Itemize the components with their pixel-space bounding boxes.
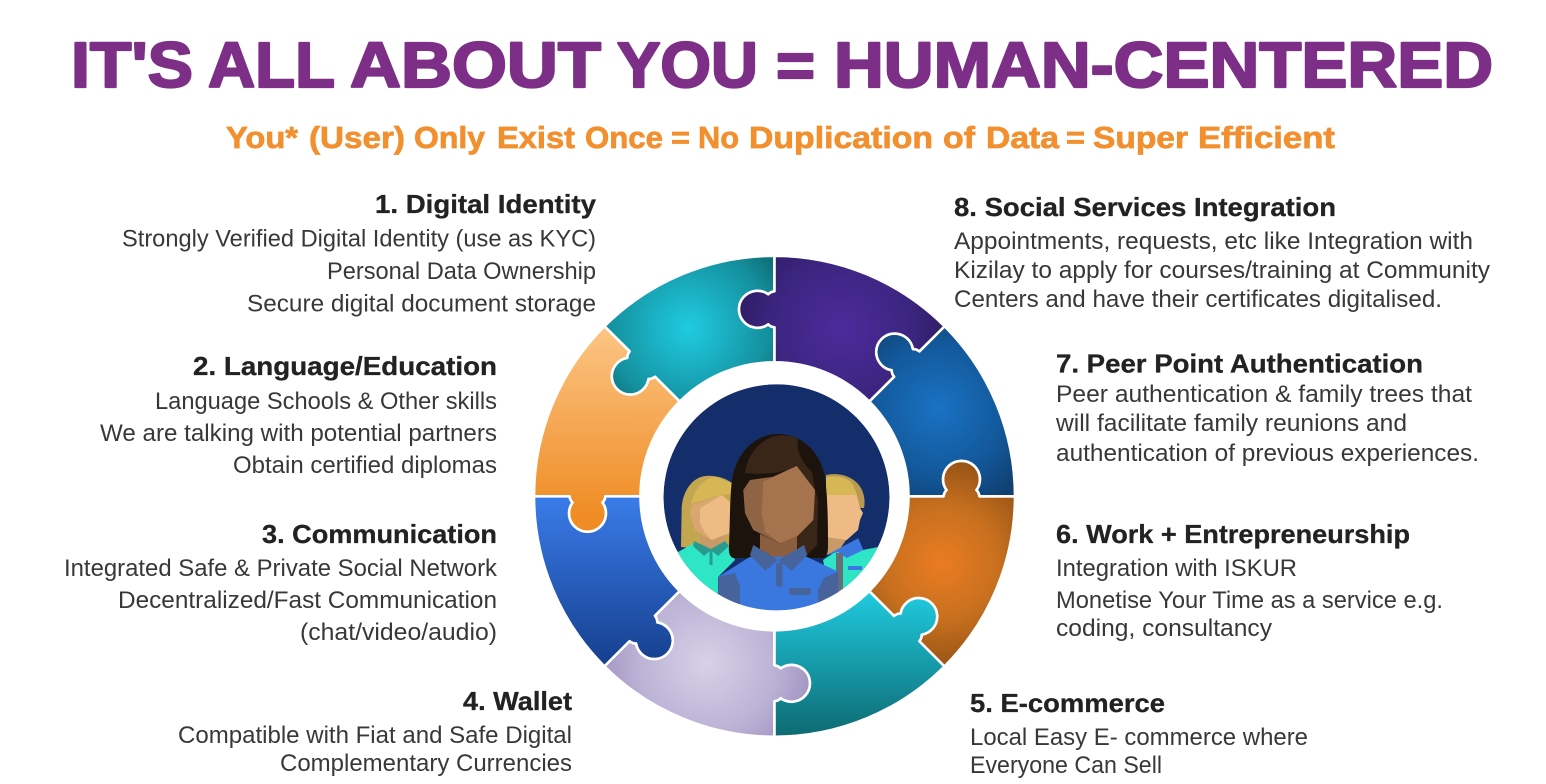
- text block: 7. Peer Point Authentication: Peer authentication & family trees that: [1056, 381, 1472, 408]
- text block: 8. Social Services Integration: Appointments, requests, etc like Integration with: [954, 228, 1473, 255]
- text block: 3. Communication: (chat/video/audio): [300, 619, 497, 646]
- text block: 4. Wallet: [178, 686, 572, 777]
- text block: 1. Digital Identity: Strongly Verified Digital Identity (use as KYC): [122, 226, 596, 252]
- title: =: [776, 29, 815, 101]
- subtitle: Super: [1093, 120, 1188, 155]
- title: HUMAN-CENTERED: [834, 29, 1493, 101]
- text block: 3. Communication: [64, 519, 498, 646]
- title: ABOUT: [350, 29, 601, 101]
- text block: 4. Wallet: 4. Wallet: [463, 686, 572, 716]
- text block: 7. Peer Point Authentication: [1055, 348, 1479, 467]
- text block: 5. E-commerce: Everyone Can Sell: [970, 752, 1162, 779]
- text block: 4. Wallet: Compatible with Fiat and Safe Digital: [178, 722, 572, 749]
- title: YOU: [617, 29, 758, 101]
- icon: right blond man: [823, 474, 878, 597]
- text block: 3. Communication: 3. Communication: [262, 519, 497, 549]
- subtitle: =: [671, 120, 690, 155]
- text block: 5. E-commerce: 5. E-commerce: [970, 688, 1165, 718]
- puzzle ring: [484, 206, 1065, 784]
- subtitle: You*: [226, 120, 299, 155]
- title: [71, 29, 1493, 101]
- text block: 3. Communication: Integrated Safe & Private Social Network: [64, 555, 498, 582]
- text block: 7. Peer Point Authentication: 7. Peer Point Authentication: [1056, 348, 1423, 378]
- puzzle piece 6: burnt orange: [869, 461, 1015, 666]
- text block: 1. Digital Identity: Personal Data Ownership: [327, 258, 596, 285]
- text block: 8. Social Services Integration: Kizilay to apply for courses/training at Community: [954, 257, 1490, 284]
- subtitle: No: [698, 120, 739, 155]
- subtitle: Data: [986, 120, 1060, 155]
- text block: 7. Peer Point Authentication: will facilitate family reunions and: [1055, 410, 1407, 437]
- subtitle: Exist: [497, 120, 575, 155]
- text block: 2. Language/Education: Obtain certified diplomas: [233, 452, 497, 479]
- text block: 6. Work + Entrepreneurship: coding, consultancy: [1056, 615, 1272, 642]
- text block: 1. Digital Identity: 1. Digital Identity: [375, 189, 597, 219]
- subtitle: Duplication: [749, 120, 933, 155]
- text block: 2. Language/Education: Language Schools & Other skills: [155, 388, 497, 415]
- text block: 6. Work + Entrepreneurship: Monetise Your Time as a service e.g.: [1056, 587, 1443, 614]
- subtitle: Only: [414, 120, 486, 155]
- puzzle piece 5: teal: [721, 538, 970, 784]
- text block: 2. Language/Education: [100, 351, 497, 479]
- text block: 5. E-commerce: Local Easy E- commerce where: [970, 724, 1308, 751]
- text block: 8. Social Services Integration: Centers and have their certificates digitalised.: [954, 286, 1442, 313]
- subtitle: of: [943, 120, 976, 155]
- subtitle: =: [1066, 120, 1085, 155]
- puzzle piece 4: lavender: [604, 591, 810, 737]
- text block: 8. Social Services Integration: [954, 192, 1490, 313]
- subtitle: (User): [309, 120, 405, 155]
- puzzle piece 2: orange: [534, 326, 680, 532]
- text block: 7. Peer Point Authentication: authentication of previous experiences.: [1056, 440, 1479, 467]
- puzzle piece 1: teal: [579, 206, 828, 454]
- icon: centre woman: [718, 434, 838, 625]
- icon: three people in centre circle: [664, 384, 890, 625]
- subtitle: Efficient: [1198, 120, 1335, 155]
- subtitle: [226, 120, 1335, 155]
- title: ALL: [208, 29, 335, 101]
- title: IT'S: [71, 29, 193, 101]
- text block: 4. Wallet: Complementary Currencies: [280, 750, 572, 777]
- text block: 5. E-commerce: [970, 688, 1308, 779]
- text block: 1. Digital Identity: Secure digital document storage: [247, 290, 596, 318]
- subtitle: Once: [585, 120, 663, 155]
- text block: 6. Work + Entrepreneurship: [1056, 519, 1443, 642]
- puzzle piece 7: dark blue: [816, 301, 1065, 550]
- text block: 2. Language/Education: 2. Language/Education: [193, 351, 497, 381]
- text block: 1. Digital Identity: [122, 189, 597, 318]
- text block: 2. Language/Education: We are talking with potential partners: [100, 420, 497, 447]
- text block: 6. Work + Entrepreneurship: Integration with ISKUR: [1056, 555, 1297, 582]
- text block: 3. Communication: Decentralized/Fast Communication: [118, 587, 497, 614]
- text block: 8. Social Services Integration: 8. Social Services Integration: [954, 192, 1336, 222]
- text block: 6. Work + Entrepreneurship: 6. Work + Entrepreneurship: [1056, 519, 1410, 549]
- icon: left blonde woman: [678, 476, 735, 605]
- puzzle piece 8: purple: [739, 256, 945, 402]
- puzzle piece 3: blue: [484, 443, 733, 691]
